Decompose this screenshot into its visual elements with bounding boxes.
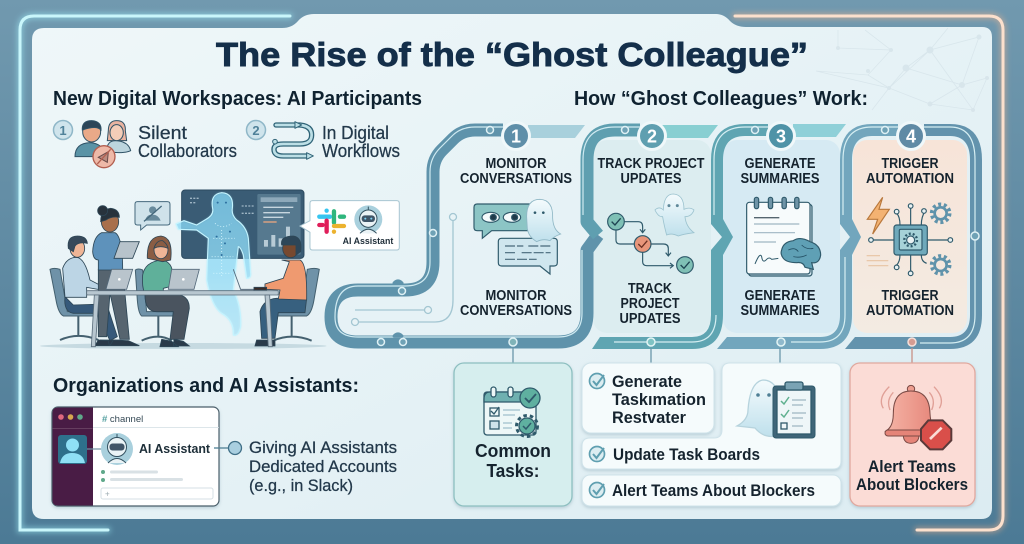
step 1 heading: MONITOR [486, 156, 547, 172]
callout connector [214, 442, 242, 454]
circuit nodes [378, 126, 979, 346]
thin circuit lines [352, 214, 456, 326]
step 4 heading: AUTOMATION [866, 171, 954, 187]
item: silent collaborators [54, 120, 237, 168]
text: Update Task Boards [613, 446, 760, 464]
person: standing woman with tablet [93, 206, 139, 346]
channel name: # channel [102, 414, 143, 425]
item: in digital workflows: Workflows [322, 140, 400, 161]
icon: silent people [75, 121, 131, 168]
icon: task flow and ghost [608, 194, 694, 273]
icon: ghost with clipboard [737, 380, 815, 438]
step 3 caption: GENERATE [744, 288, 816, 304]
step 2 caption: TRACK [628, 281, 672, 297]
connector: step 1 to common tasks [509, 338, 517, 363]
step 1 caption: CONVERSATIONS [460, 303, 572, 319]
icon: robot [354, 205, 382, 233]
heading: organizations and AI assistants: Organizations and AI Assistants: [53, 375, 359, 397]
person: seated right [254, 236, 307, 346]
icon: check [590, 482, 604, 498]
icon: slack logo [319, 211, 344, 232]
panel: generate taskimation restvater: Restvater [612, 409, 687, 427]
message input [101, 488, 213, 499]
heading: how ghost colleagues work: How “Ghost Colleagues” Work: [574, 88, 868, 110]
step 2 caption: PROJECT [620, 296, 680, 312]
circuit road: step 1 [331, 125, 598, 342]
badge: step 1: 1 [511, 126, 521, 146]
neon frame: left cyan [20, 16, 290, 530]
step 4 caption: TRIGGER [882, 288, 939, 304]
sidebar [52, 408, 93, 506]
step 4 heading [866, 156, 954, 187]
label: Common [475, 440, 551, 461]
wall monitor [182, 190, 304, 258]
slanted band after badge 1 [528, 125, 585, 138]
badge: step 3: 3 [776, 126, 786, 146]
callout: AI assistant [300, 201, 399, 250]
table [87, 291, 278, 347]
connector: step 2 to task list [647, 338, 655, 363]
step 2 caption: UPDATES [620, 311, 681, 327]
icon: check [590, 446, 604, 462]
item: silent collaborators: Collaborators [138, 140, 237, 161]
laptops [106, 269, 254, 291]
badge: step 1 [502, 122, 530, 150]
step 1 heading: CONVERSATIONS [460, 171, 572, 187]
connector: step 4 to alert [908, 338, 916, 363]
text: giving AI assistants dedicated accounts: Giving AI Assistants [249, 438, 397, 457]
step 2 heading [598, 156, 705, 187]
slanted band after badge 3 [793, 124, 846, 137]
label: Alert Teams [868, 458, 956, 476]
badge: step 2 [638, 122, 666, 150]
connector: step 3 to ghost box [777, 338, 785, 363]
step 1 caption [460, 288, 572, 319]
label: AI Assistant [343, 236, 393, 246]
panel: common tasks: Tasks: [486, 460, 540, 481]
panel: alert [850, 363, 975, 506]
icon: calendar with check and gear [484, 387, 540, 436]
step 3 heading: GENERATE [744, 156, 816, 172]
badge: step 2: 2 [647, 126, 657, 146]
panel: generate taskimation restvater [582, 363, 714, 433]
speech bubble: muted [135, 202, 170, 230]
panel: generate taskimation restvater: Taskımation [612, 391, 706, 409]
text: giving AI assistants dedicated accounts [249, 438, 397, 495]
step 3 heading: SUMMARIES [740, 171, 820, 187]
badge: step 4 [898, 122, 924, 150]
card 4 peach background [853, 140, 967, 333]
slack window mockup [52, 407, 219, 506]
robot avatar [101, 433, 133, 465]
icon: chat bubbles and ghost [474, 199, 561, 274]
panel: alert teams about blockers item [582, 475, 841, 506]
number badge 2 [246, 120, 266, 140]
step 1 caption: MONITOR [486, 288, 547, 304]
panel: alert: About Blockers [856, 476, 968, 494]
slanted band after badge 2 [662, 125, 718, 138]
step card backgrounds [593, 140, 840, 333]
item: in digital workflows [246, 120, 400, 161]
message input: + [105, 490, 110, 498]
step 4 caption: AUTOMATION [866, 303, 954, 319]
person: seated woman [142, 236, 189, 347]
chair: left person [50, 268, 98, 340]
step 2 heading: TRACK PROJECT [598, 156, 705, 172]
icon: notepad with brain [747, 197, 821, 276]
step 2 caption [620, 281, 681, 327]
step 4 heading: TRIGGER [882, 156, 939, 172]
icon: automation chip [867, 197, 953, 276]
person: seated left [63, 236, 119, 345]
text: giving AI assistants dedicated accounts: Dedicated Accounts [249, 457, 397, 476]
network pattern [816, 28, 989, 112]
label: In Digital [322, 122, 389, 143]
number badge 1: 1 [59, 123, 67, 138]
circuit road: step 3 [717, 124, 898, 349]
badge: step 3 [768, 122, 794, 150]
icon: bell with stop sign [881, 385, 951, 449]
chair: middle person [135, 269, 173, 341]
ghost hologram [176, 193, 251, 335]
text: giving AI assistants dedicated accounts: (e.g., in Slack) [249, 476, 353, 495]
illustration: meeting with holographic ghost colleague [40, 190, 399, 349]
icon: check [590, 374, 604, 388]
AI avatar [58, 435, 87, 464]
name: AI Assistant [139, 442, 211, 456]
step 3 caption: SUMMARIES [740, 303, 820, 319]
step 2 heading: UPDATES [620, 171, 682, 187]
floor shadow [40, 343, 327, 349]
text: Generate [612, 373, 682, 391]
title: The Rise of the “Ghost Colleague” [216, 37, 808, 74]
number badge 2: 2 [252, 123, 260, 138]
label: Silent [138, 122, 187, 143]
step 4 caption [866, 288, 954, 319]
circuit road: step 2 [583, 124, 768, 349]
connector to robot [87, 448, 103, 450]
number badge 1 [54, 120, 72, 140]
icon: workflow arrows [273, 122, 313, 159]
step 3 caption [740, 288, 820, 319]
step 3 heading [740, 156, 820, 187]
chair: right person [273, 268, 319, 341]
neon frame: right peach [735, 16, 1003, 530]
badge: step 4: 4 [906, 126, 916, 146]
message placeholders [101, 470, 183, 482]
heading: new digital workspaces: New Digital Workspaces: AI Participants [53, 88, 422, 110]
circuit road: step 4 [845, 124, 982, 349]
text: Alert Teams About Blockers [612, 482, 815, 500]
step 1 heading [460, 156, 572, 187]
panel: common tasks [454, 363, 572, 506]
panel: ghost checklist and task boards [582, 363, 841, 469]
